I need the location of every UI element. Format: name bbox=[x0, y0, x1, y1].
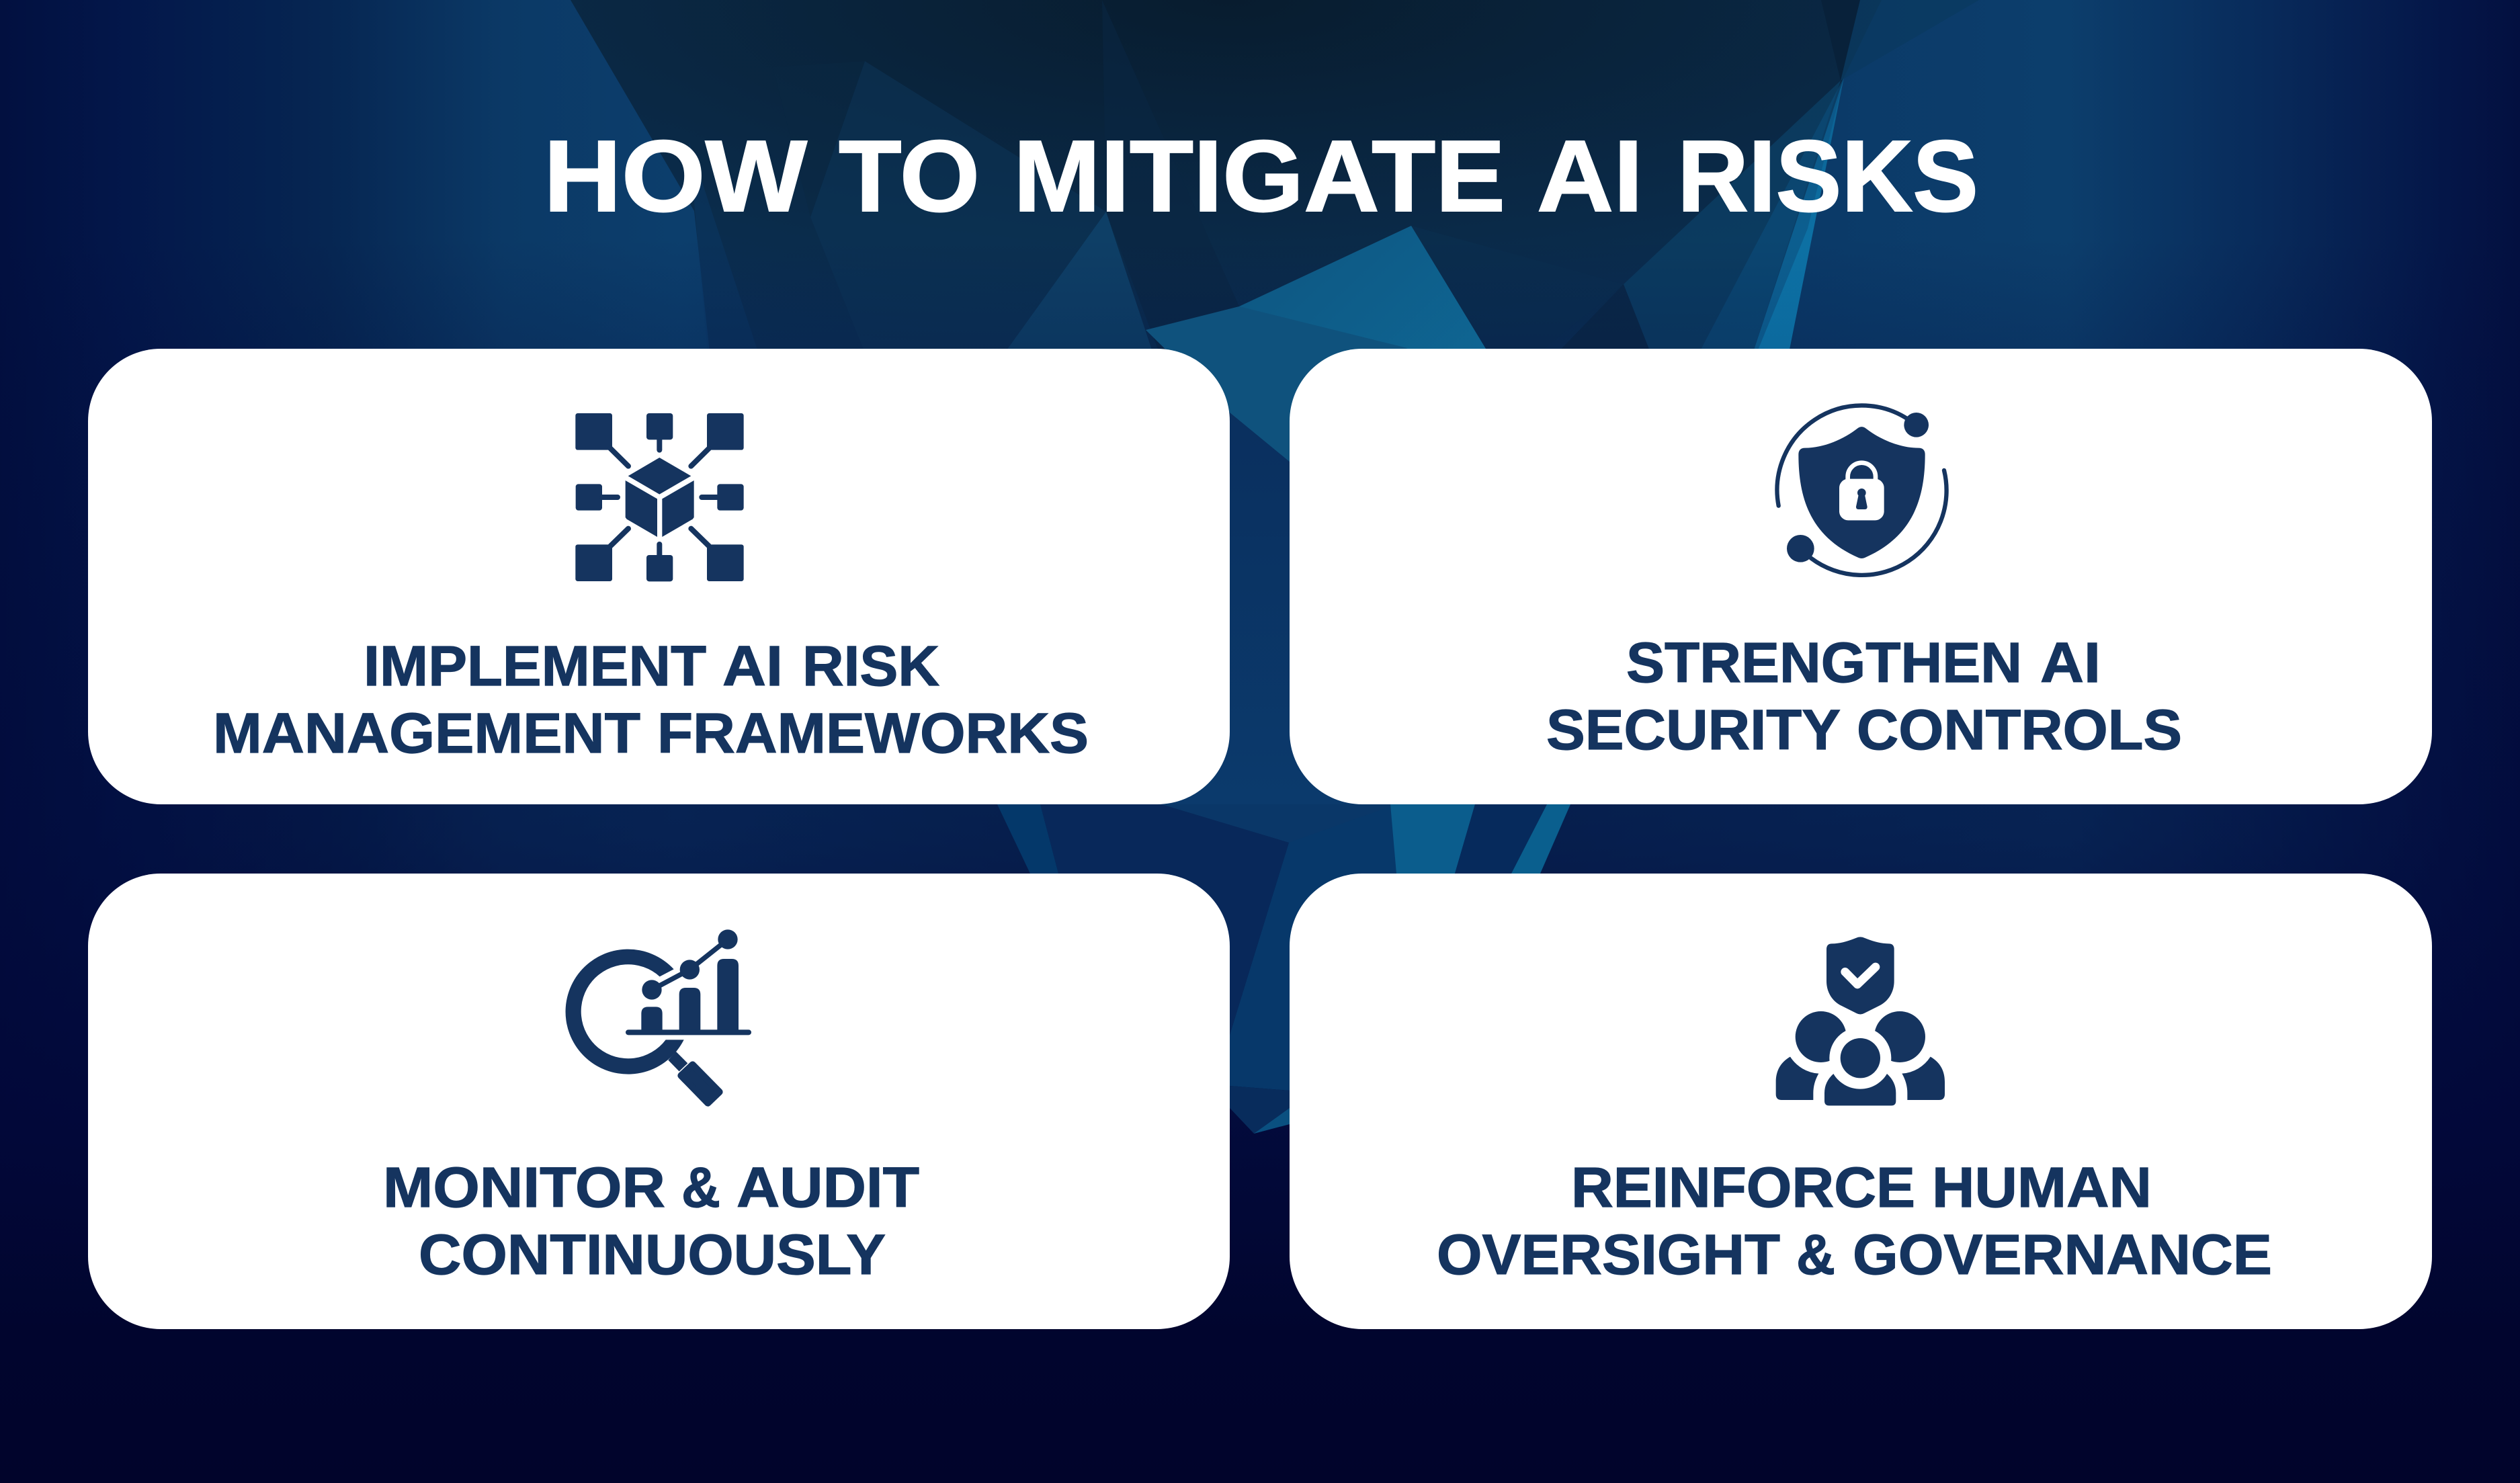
card heading: FRAMEWORKS bbox=[657, 702, 1089, 765]
card heading: AUDIT bbox=[737, 1156, 919, 1219]
card heading: MONITOR bbox=[383, 1156, 665, 1219]
panel: security controls bbox=[1290, 349, 2432, 804]
title: RISKS bbox=[1677, 119, 1978, 232]
card heading: REINFORCE bbox=[1571, 1156, 1915, 1219]
title: HOW bbox=[544, 119, 807, 232]
card heading: CONTROLS bbox=[1857, 698, 2182, 761]
title bbox=[544, 119, 1978, 232]
icon: people with shield bbox=[1776, 937, 1945, 1105]
card heading: RISK bbox=[802, 634, 939, 697]
card heading: OVERSIGHT bbox=[1437, 1223, 1780, 1286]
card heading: HUMAN bbox=[1932, 1156, 2152, 1219]
panel: human oversight bbox=[1290, 874, 2432, 1329]
panel: monitor and audit bbox=[88, 874, 1230, 1329]
card heading: & bbox=[1796, 1223, 1835, 1286]
card heading bbox=[383, 1156, 919, 1286]
card heading: STRENGTHEN bbox=[1626, 631, 2022, 694]
card heading bbox=[1546, 631, 2182, 761]
icon: shield with lock bbox=[1777, 405, 1947, 575]
icon: magnifier with chart bbox=[566, 929, 751, 1103]
card heading: AI bbox=[722, 634, 783, 697]
card heading: MANAGEMENT bbox=[213, 702, 640, 765]
title: TO bbox=[839, 119, 980, 232]
card heading: IMPLEMENT bbox=[364, 634, 706, 697]
card heading: AI bbox=[2040, 631, 2101, 694]
card heading: SECURITY bbox=[1546, 698, 1841, 761]
card heading: & bbox=[681, 1156, 720, 1219]
title: MITIGATE bbox=[1013, 119, 1505, 232]
card heading: GOVERNANCE bbox=[1853, 1223, 2272, 1286]
title: AI bbox=[1537, 119, 1643, 232]
card heading: CONTINUOUSLY bbox=[419, 1223, 886, 1286]
card heading bbox=[1437, 1156, 2272, 1286]
panel: implement frameworks bbox=[88, 349, 1230, 804]
card heading bbox=[213, 634, 1089, 765]
icon: cube network bbox=[575, 413, 744, 581]
